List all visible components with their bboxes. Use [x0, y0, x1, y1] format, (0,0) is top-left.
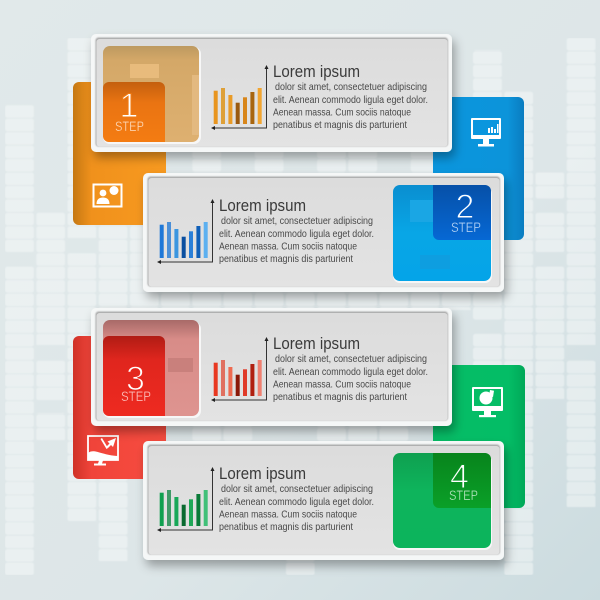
step 3 label: STEP [121, 388, 151, 404]
step 4 window [393, 453, 492, 550]
step 4 body text: elit. Aenean commodo ligula eget dolor. [219, 497, 374, 508]
step 1 bar chart [211, 65, 268, 130]
step 2 bar chart [157, 199, 214, 264]
step 3 title: Lorem ipsum [273, 335, 360, 353]
step 1 body text: dolor sit amet, consectetuer adipiscing [275, 82, 427, 93]
step 4 body text: dolor sit amet, consectetuer adipiscing [221, 484, 373, 495]
step 4 bar chart [157, 467, 214, 532]
step 4 body text: Aenean massa. Cum sociis natoque [219, 510, 357, 520]
step 1 body text: Aenean massa. Cum sociis natoque [273, 108, 411, 118]
step 3 body text: penatibus et magnis dis parturient [273, 392, 407, 403]
step 3 number: 3 [126, 360, 145, 398]
icon: monitor with bars [471, 118, 501, 146]
step 2 body text [219, 216, 374, 265]
step 4 label: STEP [449, 487, 478, 503]
step 3 body text: elit. Aenean commodo ligula eget dolor. [273, 367, 428, 378]
step 1 body text: elit. Aenean commodo ligula eget dolor. [273, 95, 428, 106]
step 1 label: STEP [115, 118, 144, 134]
icon: monitor with arrow [88, 436, 118, 466]
panel: blue back tab with icon [433, 97, 524, 240]
step 4 body text: penatibus et magnis dis parturient [219, 522, 353, 533]
panel: step 4 card [143, 441, 504, 560]
step 2 body text: elit. Aenean commodo ligula eget dolor. [219, 229, 374, 240]
step 2 title: Lorem ipsum [219, 197, 306, 215]
step 2 body text: penatibus et magnis dis parturient [219, 254, 353, 265]
step 2 number: 2 [456, 188, 474, 226]
panel: step 3 card [91, 308, 452, 426]
step 3 body text: Aenean massa. Cum sociis natoque [273, 380, 411, 390]
step 2 body text: Aenean massa. Cum sociis natoque [219, 242, 357, 252]
step 4 number: 4 [450, 458, 469, 496]
step 1 window [103, 46, 201, 144]
step 3 bar chart [211, 337, 268, 402]
step 1 body text: penatibus et magnis dis parturient [273, 120, 407, 131]
icon: presentation with person and pie [94, 184, 122, 206]
step 3 window [103, 320, 201, 418]
step 1 number: 1 [120, 87, 138, 125]
panel: orange back tab with icon [73, 82, 166, 225]
panel: green back tab with icon [433, 365, 525, 508]
step 4 body text [219, 484, 374, 533]
step 3 body text [273, 354, 428, 403]
step 1 body text [273, 82, 428, 131]
step 2 window [393, 185, 492, 283]
step 2 body text: dolor sit amet, consectetuer adipiscing [221, 216, 373, 227]
icon: monitor with pie [472, 387, 503, 417]
step 3 body text: dolor sit amet, consectetuer adipiscing [275, 354, 427, 365]
step 4 title: Lorem ipsum [219, 465, 306, 483]
panel: step 1 card [91, 34, 452, 152]
step 2 label: STEP [451, 219, 481, 235]
step 1 title: Lorem ipsum [273, 63, 360, 81]
panel: step 2 card [143, 173, 504, 292]
panel: red back tab with icon [73, 336, 166, 479]
